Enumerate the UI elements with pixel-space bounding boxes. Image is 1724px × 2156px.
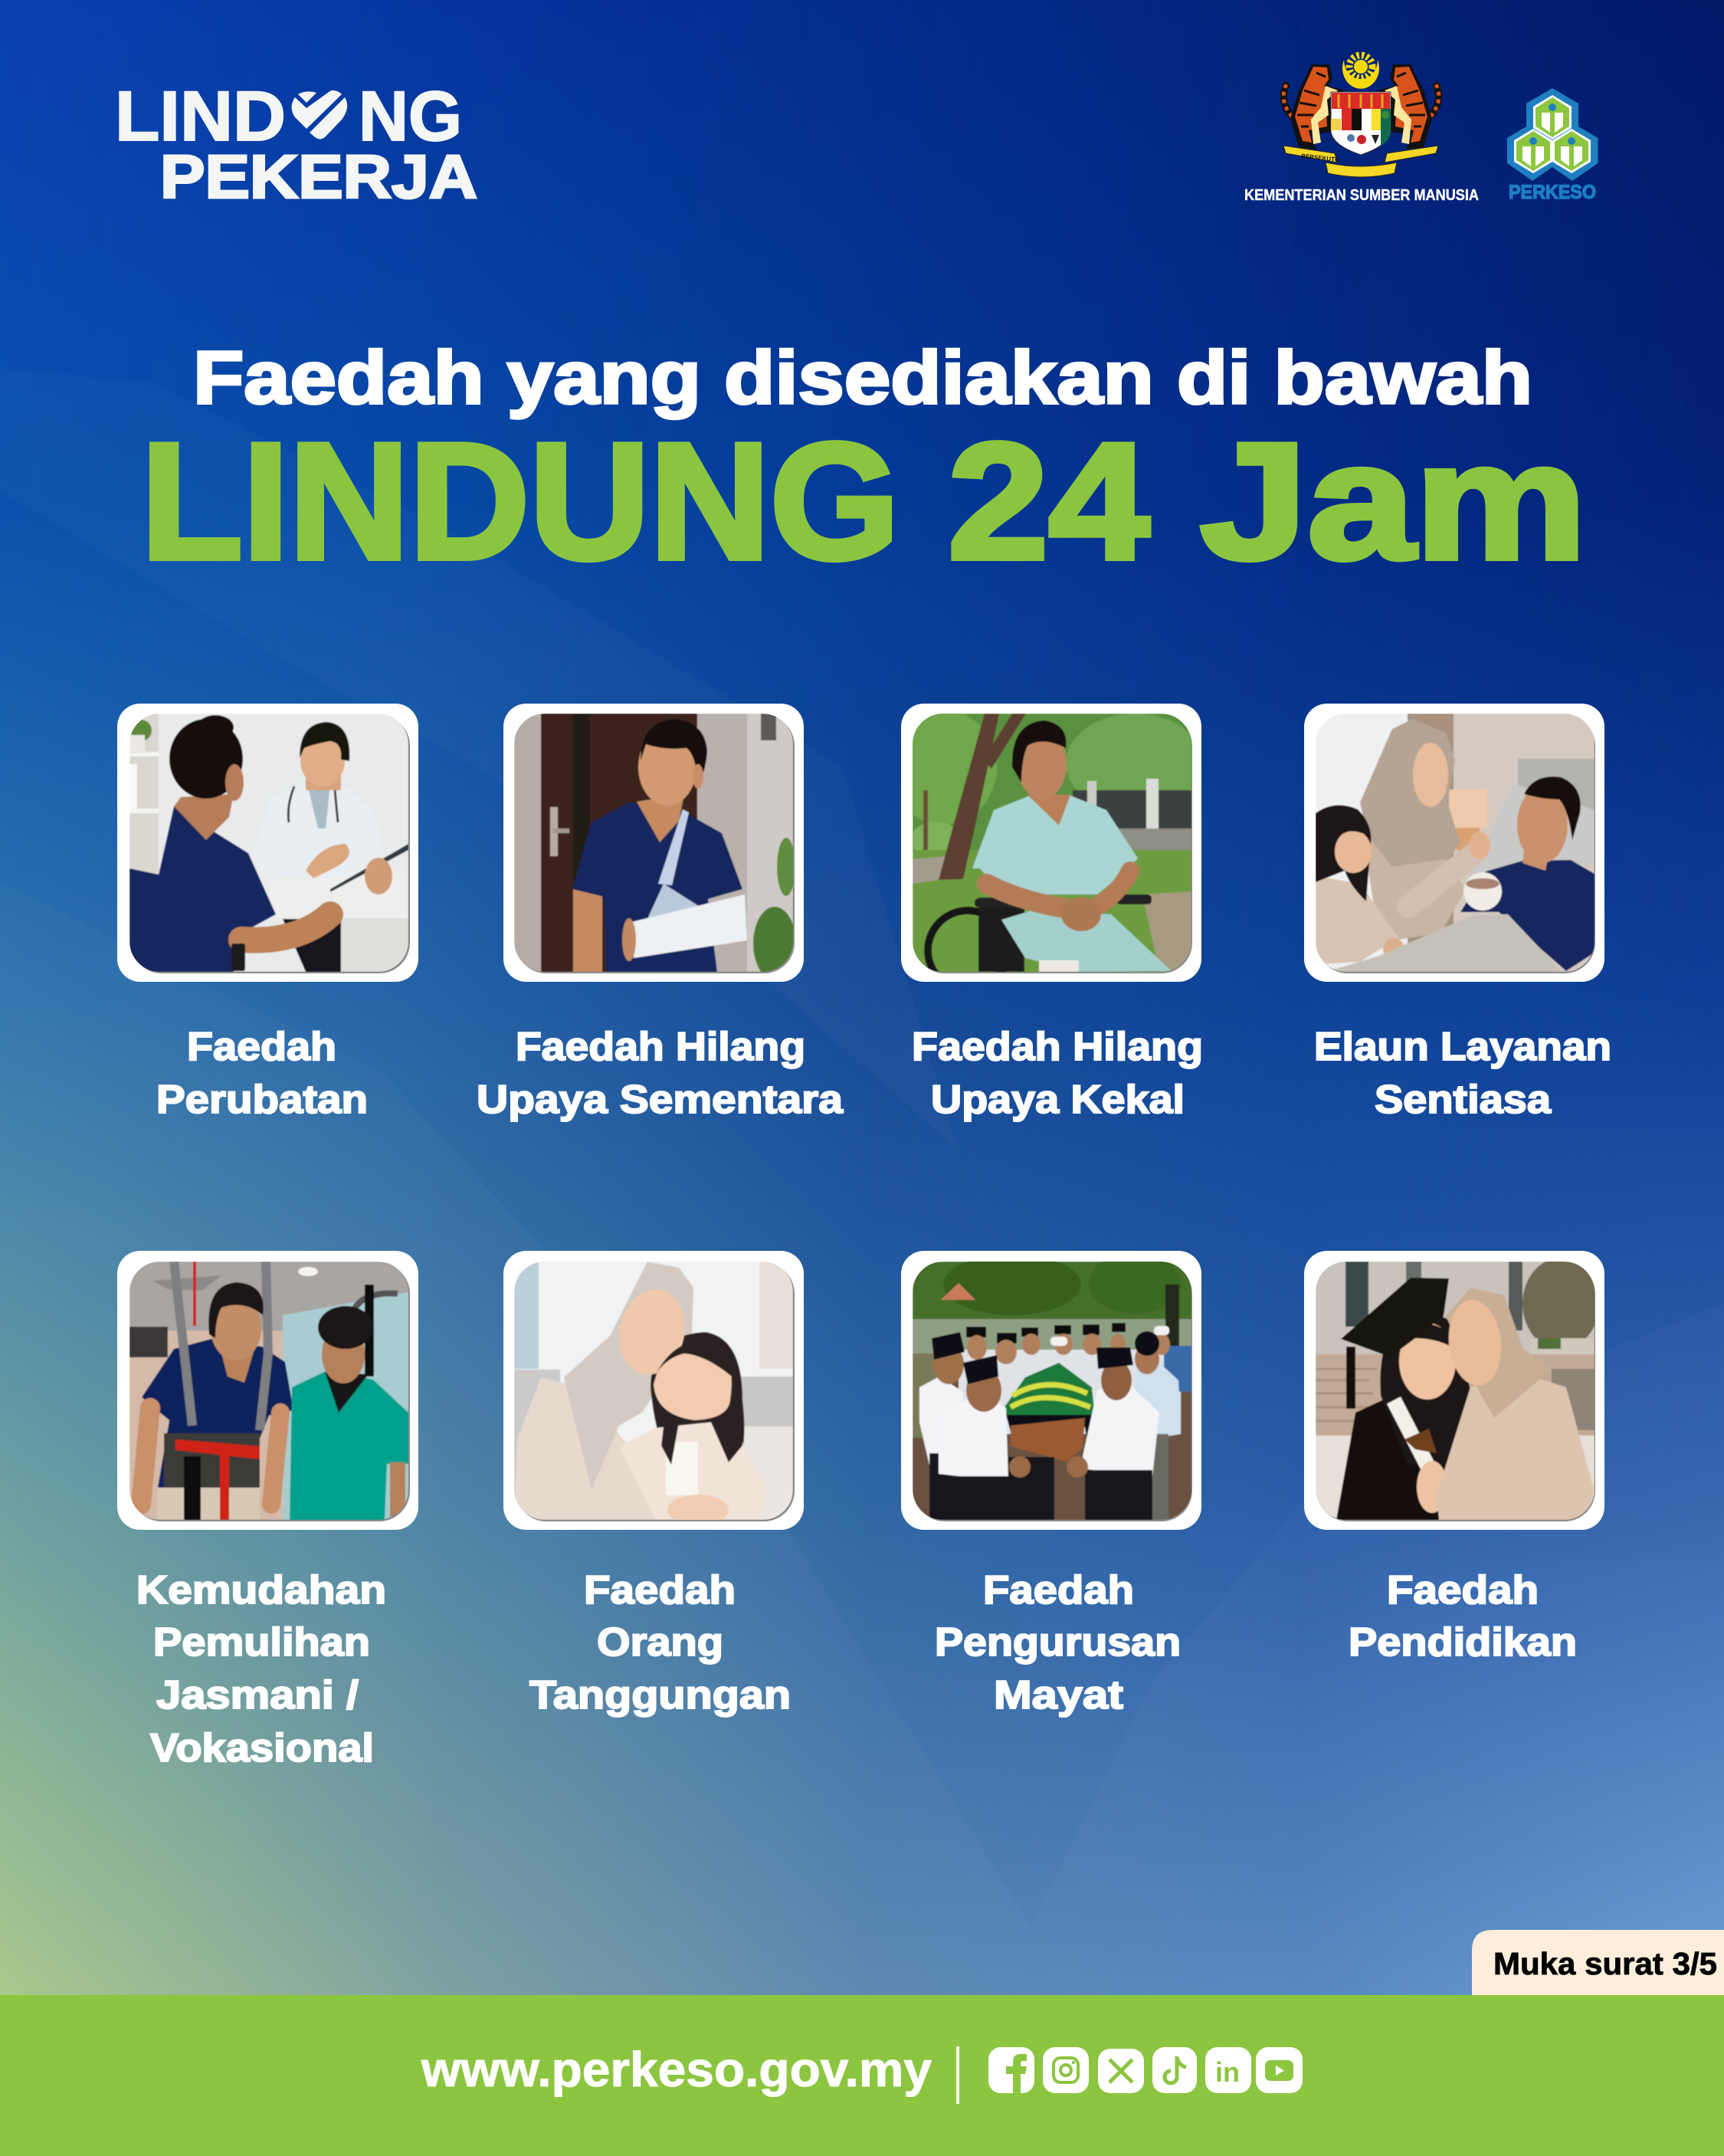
label: Kemudahan Pemulihan Jasmani / Vokasional (136, 1568, 386, 1770)
photo card: man with arm sling (503, 704, 804, 982)
label: Elaun Layanan Sentiasa: Elaun Layanan (1314, 1025, 1611, 1069)
label: Faedah Pengurusan Mayat: Mayat (994, 1673, 1123, 1718)
icon: PERKESO hexagons (1507, 88, 1598, 181)
photo card: mother and daughter (503, 1251, 804, 1530)
panel: Faedah Pendidikan (1304, 1251, 1604, 1665)
logo word NG: NG (359, 77, 462, 156)
label: Faedah Pengurusan Mayat: Pengurusan (935, 1620, 1181, 1665)
label: Kemudahan Pemulihan Jasmani / Vokasional: Kemudahan (136, 1568, 386, 1613)
divider (956, 2046, 959, 2104)
label: Kemudahan Pemulihan Jasmani / Vokasional: Jasmani / (156, 1673, 359, 1718)
icon: Instagram (1043, 2047, 1089, 2093)
panel: Kemudahan Pemulihan Jasmani / Vokasional (117, 1251, 418, 1770)
title line 2: 24 (948, 408, 1149, 593)
logo: Lindung Pekerja (115, 77, 477, 211)
title line 2: Jam (1200, 408, 1587, 593)
label: Kemudahan Pemulihan Jasmani / Vokasional: Vokasional (150, 1726, 374, 1770)
icon: Facebook (988, 2047, 1034, 2093)
PERKESO wordmark: PERKESO (1509, 182, 1596, 203)
motto text: BERSEKUTU (1301, 153, 1339, 163)
title (141, 336, 1587, 593)
label: Faedah Hilang Upaya Kekal: Upaya Kekal (931, 1078, 1185, 1122)
label: Faedah Hilang Upaya Kekal: Faedah Hilang (912, 1025, 1203, 1069)
icon: LinkedIn: in (1215, 2056, 1240, 2088)
label: Faedah Hilang Upaya Sementara: Faedah Hilang (516, 1025, 805, 1069)
icon: motto ribbon (1283, 146, 1438, 177)
label: Faedah Perubatan: Perubatan (156, 1078, 368, 1122)
label: Elaun Layanan Sentiasa (1314, 1025, 1611, 1122)
logo: PERKESO (1507, 88, 1598, 203)
label: Faedah Pengurusan Mayat: Faedah (983, 1568, 1134, 1613)
panel: Faedah Pengurusan Mayat (901, 1251, 1201, 1718)
icon: left tiger (1283, 64, 1345, 149)
icon: shield (1331, 92, 1391, 155)
ministry name: KEMENTERIAN SUMBER MANUSIA (1244, 187, 1479, 204)
title line 2 (141, 408, 1587, 593)
panel: Elaun Layanan Sentiasa (1304, 704, 1611, 1122)
panel: Faedah Hilang Upaya Kekal (890, 704, 1204, 1122)
panel: Faedah Hilang Upaya Sementara (477, 704, 844, 1122)
icon: LinkedIn (1205, 2047, 1251, 2093)
icon: crescent and sun (1342, 55, 1379, 89)
label: Faedah Perubatan (156, 1025, 368, 1122)
label: Faedah Orang Tanggungan: Faedah (584, 1568, 736, 1613)
label: Faedah Perubatan: Faedah (187, 1025, 336, 1069)
page number text: Muka surat 3/5 (1493, 1946, 1717, 1981)
label: Faedah Hilang Upaya Kekal (912, 1025, 1203, 1122)
logo: Kementerian Sumber Manusia coat of arms (1244, 55, 1479, 204)
label: Faedah Pendidikan: Faedah (1387, 1568, 1539, 1613)
panel: Faedah Orang Tanggungan (503, 1251, 804, 1718)
label: Faedah Pendidikan: Pendidikan (1349, 1620, 1577, 1665)
photo card: man in wheelchair (890, 704, 1204, 990)
icon: YouTube (1256, 2047, 1303, 2093)
icon: X (1098, 2049, 1144, 2093)
panel: Faedah Perubatan (117, 704, 418, 1122)
icon: heart with check mark (291, 90, 347, 139)
logo word PEKERJA: PEKERJA (160, 143, 477, 211)
title line 1: Faedah yang disediakan di bawah (193, 336, 1532, 419)
label: Elaun Layanan Sentiasa: Sentiasa (1375, 1078, 1552, 1122)
label: Faedah Hilang Upaya Sementara: Upaya Sementara (477, 1078, 844, 1122)
website URL: www.perkeso.gov.my (421, 2042, 932, 2097)
label: Faedah Orang Tanggungan: Orang (597, 1620, 723, 1665)
label: Kemudahan Pemulihan Jasmani / Vokasional: Pemulihan (153, 1620, 370, 1665)
page number tab (1472, 1930, 1724, 1996)
title line 2: LINDUNG (141, 408, 900, 593)
photo card: funeral procession (901, 1251, 1201, 1530)
photo card: rehabilitation with therapist (117, 1251, 418, 1530)
label: Faedah Orang Tanggungan: Tanggungan (529, 1673, 791, 1718)
label: Faedah Pendidikan (1349, 1568, 1577, 1665)
icon: right tiger (1378, 64, 1439, 149)
logo word LIND: LIND (115, 77, 286, 156)
photo card: family caring for man in bed (1304, 704, 1604, 982)
photo card: doctor consultation (117, 704, 418, 982)
label: Faedah Hilang Upaya Sementara (477, 1025, 844, 1122)
label: Faedah Orang Tanggungan (529, 1568, 791, 1718)
photo card: graduate and mother (1304, 1251, 1604, 1530)
icon: TikTok (1152, 2047, 1197, 2093)
footer bar (0, 1995, 1724, 2156)
label: Faedah Pengurusan Mayat (935, 1568, 1181, 1718)
